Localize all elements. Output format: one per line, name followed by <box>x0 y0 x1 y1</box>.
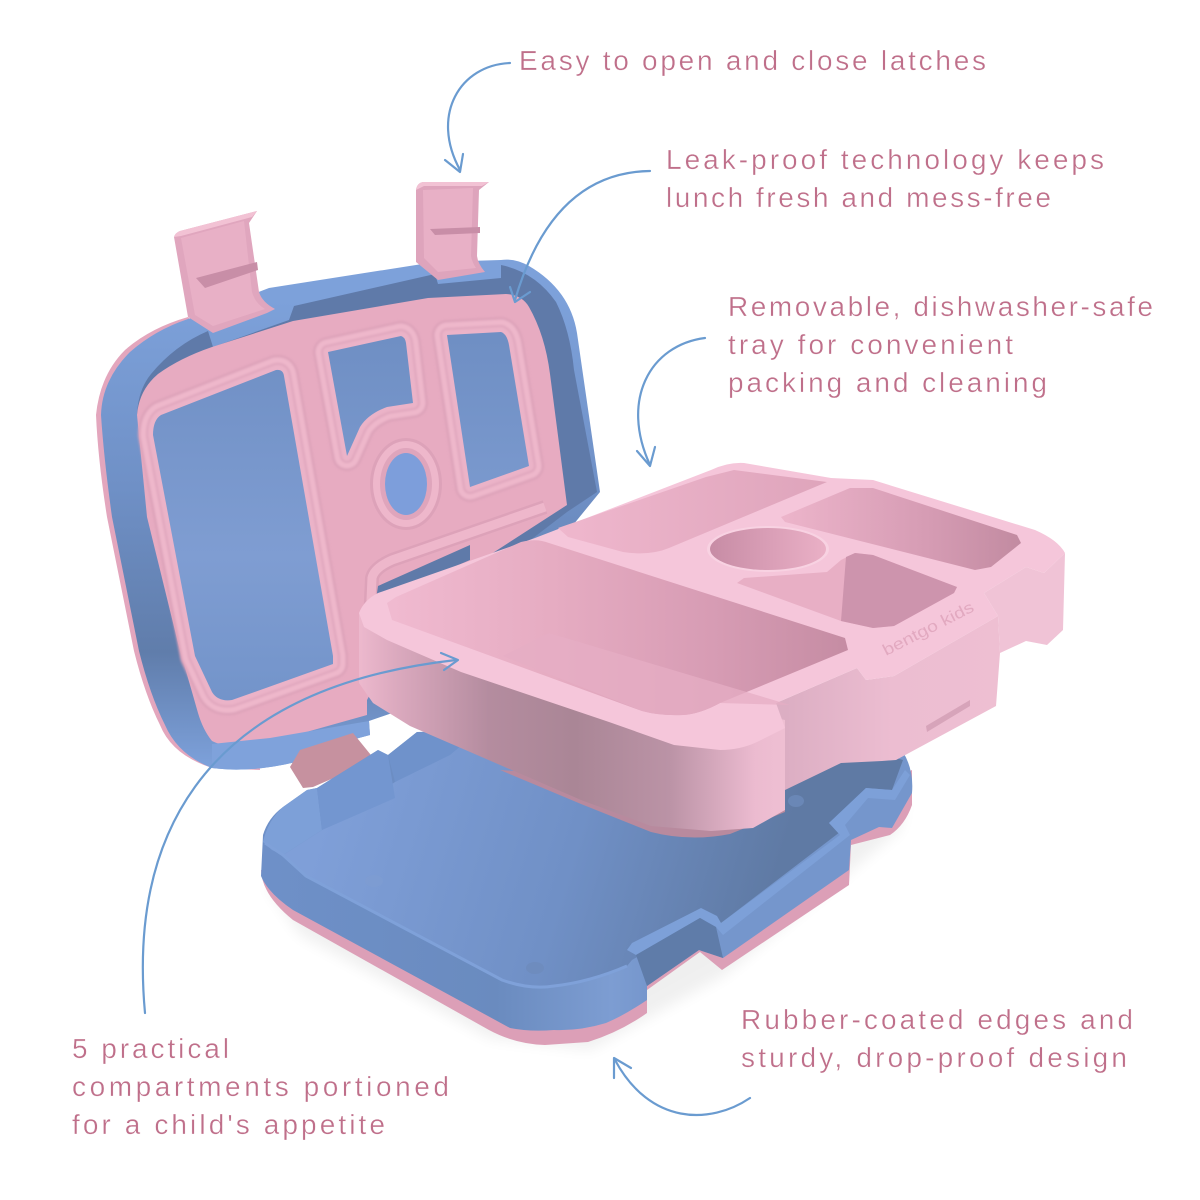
base inner left wall <box>263 788 322 855</box>
callout: compartments: for a child's appetite <box>72 1109 385 1140</box>
lunchbox base <box>261 730 912 1050</box>
lid lower ridge and slot <box>370 507 545 622</box>
tray upper compartment <box>558 470 827 553</box>
callout: removable tray <box>728 291 1153 398</box>
lid blue shell <box>101 260 600 770</box>
tray large compartment floor <box>503 633 790 715</box>
lid pink liner <box>137 294 567 747</box>
arrow: rubber edges <box>614 1058 750 1115</box>
callout: latches: Easy to open and close latches <box>519 45 986 76</box>
base floor dimples <box>365 795 804 974</box>
base hinge post <box>317 750 395 830</box>
lid compartment: right window <box>447 332 529 487</box>
tray <box>359 463 1065 838</box>
base back wall behind post <box>388 730 480 782</box>
tray right wall <box>776 616 1000 790</box>
base front rim <box>265 843 627 987</box>
arrow: tray <box>637 338 705 466</box>
tray far right wall <box>984 553 1065 653</box>
callout: rubber edges: sturdy, drop-proof design <box>741 1042 1127 1073</box>
lid compartment: middle window <box>328 336 413 456</box>
arrow: latches <box>445 63 510 172</box>
callout: rubber edges <box>741 1004 1133 1073</box>
lid dark inner wall <box>137 265 597 741</box>
lid liner ridges <box>153 332 529 700</box>
tray top surface <box>359 463 1065 750</box>
callout: leak-proof: Leak-proof technology keeps <box>666 144 1104 175</box>
base blue shell <box>261 732 912 1031</box>
arrow: leak-proof <box>510 171 650 302</box>
callout: removable tray: Removable, dishwasher-safe <box>728 291 1153 322</box>
callout: leak-proof: lunch fresh and mess-free <box>666 182 1051 213</box>
callout: compartments <box>72 1033 449 1140</box>
base inner floor <box>283 730 903 987</box>
lid hinge rim <box>212 721 370 770</box>
base pink rubber edge <box>261 770 912 1045</box>
hinge strap <box>290 733 375 788</box>
lid <box>96 260 600 770</box>
callout: compartments: 5 practical <box>72 1033 229 1064</box>
lid compartment: large window <box>153 370 333 700</box>
base clip wall <box>636 918 723 986</box>
left latch <box>174 211 275 333</box>
base soft shadow <box>266 800 905 1050</box>
callout: compartments: compartments portioned <box>72 1071 449 1102</box>
arrow: compartments <box>143 653 458 1013</box>
tray underside strip <box>500 770 785 838</box>
callout: leak-proof <box>666 144 1104 213</box>
tray large compartment <box>387 540 848 715</box>
tray round cup <box>707 526 829 572</box>
lid pink outer edge <box>96 317 260 770</box>
tray logo: bentgo kids <box>880 599 977 660</box>
right latch <box>416 182 489 280</box>
callout: rubber edges: Rubber-coated edges and <box>741 1004 1133 1035</box>
tray small tab <box>926 700 970 732</box>
callout: removable tray: packing and cleaning <box>728 367 1047 398</box>
base right clip <box>627 770 910 955</box>
callout: removable tray: tray for convenient <box>728 329 1013 360</box>
tray right compartment <box>781 488 1021 570</box>
tray small compartment <box>737 553 957 628</box>
lid compartment: round window <box>370 438 442 530</box>
tray front wall <box>359 613 785 831</box>
